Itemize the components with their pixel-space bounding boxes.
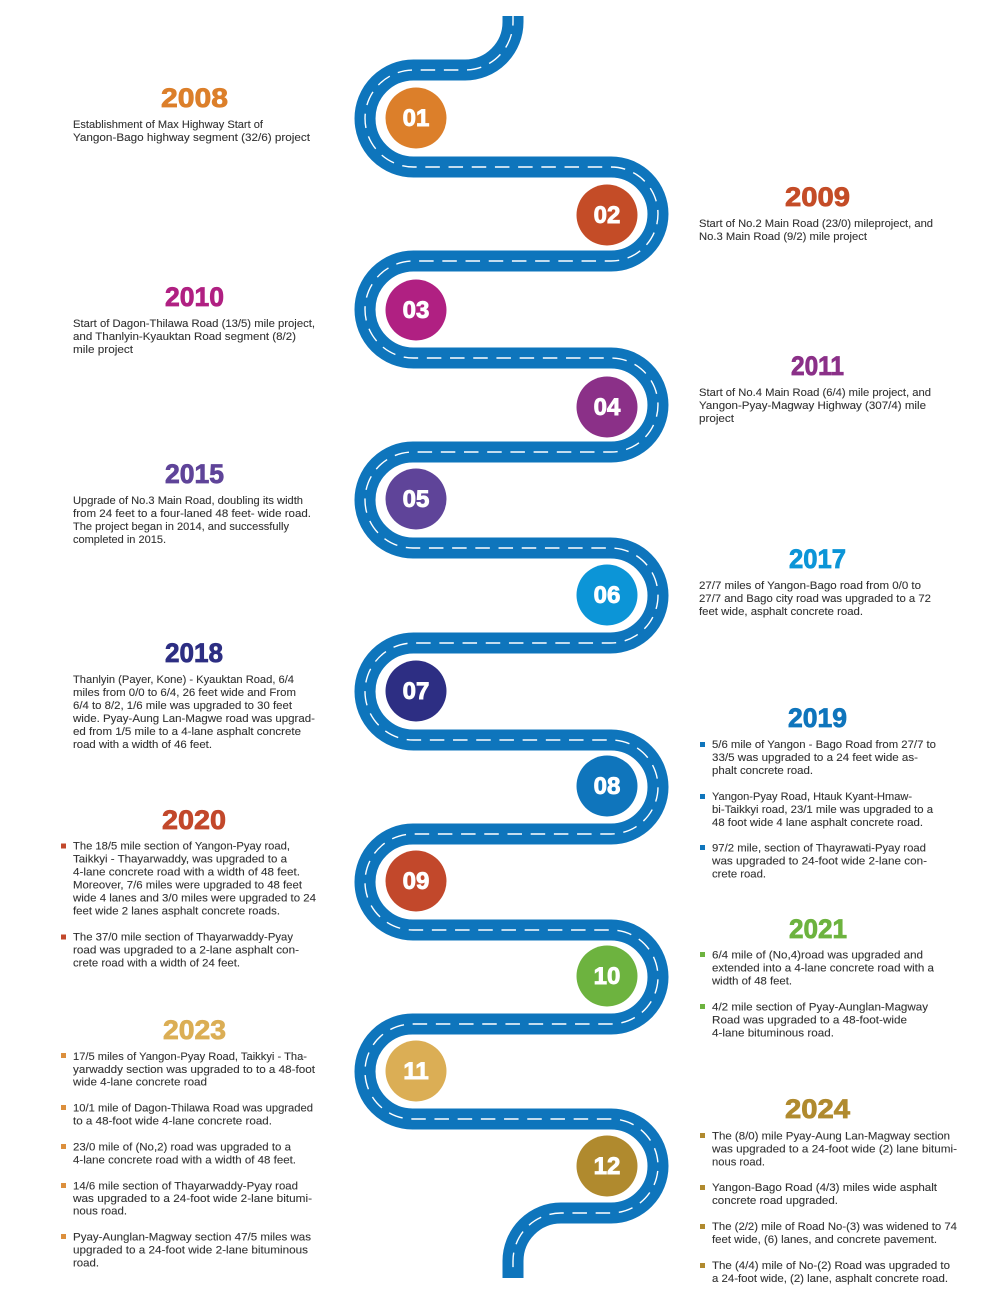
bullet list 2023: yarwaddy section was upgraded to to a 48-foot	[73, 1064, 315, 1076]
text block 2009: No.3 Main Road (9/2) mile project	[699, 231, 867, 243]
marker 07: 07	[403, 678, 429, 705]
marker 11: 11	[403, 1058, 429, 1085]
text block 2018: road with a width of 46 feet.	[73, 739, 212, 751]
marker 08	[576, 756, 638, 816]
text block 2011: project	[699, 413, 734, 425]
text block 2010	[73, 318, 315, 356]
bullet list 2020: road was upgraded to a 2-lane asphalt con-	[73, 944, 299, 956]
panel: 2018	[72, 638, 315, 751]
bullet list 2020: The 18/5 mile section of Yangon-Pyay road,	[73, 840, 290, 852]
bullet list 2020: Taikkyi - Thayarwaddy, was upgraded to a	[73, 854, 288, 866]
bullet list 2021: Road was upgraded to a 48-foot-wide	[712, 1014, 907, 1026]
bullet list 2019: 48 foot wide 4 lane asphalt concrete road.	[712, 817, 923, 829]
marker 07	[386, 660, 446, 722]
bullet list 2024: Yangon-Bago Road (4/3) miles wide asphalt	[712, 1182, 937, 1194]
bullet list 2023: 14/6 mile section of Thayarwaddy-Pyay road	[73, 1180, 298, 1192]
bullet list 2021: extended into a 4-lane concrete road with a	[712, 962, 935, 974]
bullet list 2023: 23/0 mile of (No,2) road was upgraded to a	[73, 1142, 292, 1154]
text block 2018: ed from 1/5 mile to a 4-lane asphalt concrete	[73, 726, 301, 738]
bullet list 2019	[700, 739, 936, 880]
text block 2017: 27/7 and Bago city road was upgraded to a 72	[699, 593, 931, 605]
heading 2018: 2018	[165, 638, 223, 668]
marker 01: 01	[403, 105, 429, 132]
text block 2018: Thanlyin (Payer, Kone) - Kyauktan Road, 6/4	[73, 674, 294, 686]
marker 04: 04	[594, 394, 621, 421]
bullet list 2019: bi-Taikkyi road, 23/1 mile was upgraded to a	[712, 804, 934, 816]
bullet list 2023: nous road.	[73, 1206, 127, 1218]
panel: 2011	[699, 351, 931, 425]
text block 2008: Establishment of Max Highway Start of	[73, 119, 264, 131]
text block 2017: feet wide, asphalt concrete road.	[699, 606, 863, 618]
bullet list 2020: Moreover, 7/6 miles were upgraded to 48 feet	[73, 880, 302, 892]
panel: 2019	[700, 703, 936, 880]
text block 2018: miles from 0/0 to 6/4, 26 feet wide and From	[73, 687, 296, 699]
panel: 2010	[73, 282, 315, 356]
bullet list 2024: was upgraded to a 24-foot wide (2) lane bitumi-	[711, 1144, 957, 1156]
marker 08: 08	[594, 773, 620, 800]
marker 03: 03	[403, 297, 429, 324]
text block 2015: Upgrade of No.3 Main Road, doubling its width	[73, 495, 303, 507]
panel: 2008	[73, 83, 310, 144]
heading 2010: 2010	[165, 282, 224, 312]
marker 06	[576, 564, 638, 626]
marker 10: 10	[594, 963, 620, 990]
heading 2011: 2011	[791, 351, 844, 381]
bullet list 2024: nous road.	[712, 1156, 765, 1168]
heading 2008: 2008	[161, 83, 228, 113]
bullet list 2021: 4/2 mile section of Pyay-Aunglan-Magway	[712, 1002, 929, 1014]
bullet list 2023: road.	[73, 1258, 99, 1270]
text block 2011	[699, 387, 931, 425]
heading 2024: 2024	[785, 1094, 850, 1124]
bullet list 2019: phalt concrete road.	[712, 765, 813, 777]
bullet list 2023: 4-lane concrete road with a width of 48 feet.	[73, 1154, 296, 1166]
bullet list 2019: 5/6 mile of Yangon - Bago Road from 27/7 to	[712, 739, 936, 751]
text block 2018: 6/4 to 8/2, 1/6 mile was upgraded to 30 feet	[73, 700, 292, 712]
bullet list 2019: 33/5 was upgraded to a 24 feet wide as-	[712, 752, 918, 764]
bullet list 2021: 4-lane bituminous road.	[712, 1028, 834, 1040]
bullet list 2024: The (4/4) mile of No-(2) Road was upgraded to	[712, 1260, 950, 1272]
bullet list 2020: feet wide 2 lanes asphalt concrete roads.	[73, 906, 280, 918]
text block 2010: mile project	[73, 344, 133, 356]
bullet list 2023: was upgraded to a 24-foot wide 2-lane bitumi-	[72, 1193, 312, 1205]
marker 09	[386, 850, 446, 912]
bullet list 2023: wide 4-lane concrete road	[72, 1076, 207, 1088]
bullet list 2020: wide 4 lanes and 3/0 miles were upgraded to 24	[72, 892, 316, 904]
marker 02	[576, 184, 638, 246]
text block 2009	[699, 218, 933, 243]
panel: 2020	[61, 805, 316, 970]
marker 06: 06	[594, 582, 620, 609]
heading 2017: 2017	[789, 544, 846, 574]
marker 01	[386, 88, 446, 148]
bullet list 2021: 6/4 mile of (No,4)road was upgraded and	[712, 950, 923, 962]
bullet list 2024: The (8/0) mile Pyay-Aung Lan-Magway section	[712, 1130, 950, 1142]
bullet list 2021	[700, 950, 935, 1040]
heading 2009: 2009	[785, 182, 850, 212]
text block 2010: Start of Dagon-Thilawa Road (13/5) mile project,	[73, 318, 315, 330]
bullet list 2021: width of 48 feet.	[711, 976, 792, 988]
bullet list 2023: Pyay-Aunglan-Magway section 47/5 miles was	[73, 1232, 312, 1244]
bullet list 2020: crete road with a width of 24 feet.	[73, 958, 240, 970]
marker 05: 05	[403, 486, 429, 513]
marker 10	[576, 946, 638, 1006]
bullet list 2024: The (2/2) mile of Road No-(3) was widened to 74	[712, 1221, 957, 1233]
text block 2015	[73, 495, 311, 546]
bullet list 2024	[700, 1130, 957, 1285]
marker 12	[576, 1136, 638, 1196]
bullet list 2020: The 37/0 mile section of Thayarwaddy-Pyay	[73, 932, 294, 944]
heading 2019: 2019	[788, 703, 847, 733]
heading 2015: 2015	[165, 459, 224, 489]
text block 2015: from 24 feet to a four-laned 48 feet- wide road.	[73, 508, 311, 520]
marker 03	[386, 280, 446, 340]
bullet list 2019: Yangon-Pyay Road, Htauk Kyant-Hmaw-	[712, 791, 912, 803]
heading 2023: 2023	[163, 1015, 226, 1045]
text block 2011: Start of No.4 Main Road (6/4) mile project, and	[699, 387, 931, 399]
bullet list 2019: crete road.	[712, 868, 766, 880]
bullet list 2020: 4-lane concrete road with a width of 48 feet.	[73, 866, 300, 878]
bullet list 2023: upgraded to a 24-foot wide 2-lane bituminous	[73, 1244, 309, 1256]
marker 11	[386, 1040, 446, 1102]
text block 2017	[699, 580, 931, 618]
panel: 2024	[700, 1094, 957, 1285]
panel: 2009	[699, 182, 933, 243]
bullet list 2019: 97/2 mile, section of Thayrawati-Pyay road	[712, 842, 926, 854]
text block 2008	[73, 119, 310, 144]
text block 2010: and Thanlyin-Kyauktan Road segment (8/2)	[73, 331, 296, 343]
marker 12: 12	[594, 1153, 620, 1180]
bullet list 2023: 17/5 miles of Yangon-Pyay Road, Taikkyi - Tha-	[73, 1051, 307, 1063]
winding road	[365, 16, 658, 1278]
panel: 2021	[700, 914, 935, 1040]
text block 2017: 27/7 miles of Yangon-Bago road from 0/0 to	[699, 580, 921, 592]
bullet list 2023: to a 48-foot wide 4-lane concrete road.	[73, 1116, 272, 1128]
bullet list 2019: was upgraded to 24-foot wide 2-lane con-	[711, 856, 927, 868]
marker 09: 09	[403, 868, 429, 895]
marker 04	[576, 376, 638, 438]
text block 2008: Yangon-Bago highway segment (32/6) project	[73, 132, 310, 144]
panel: 2015	[73, 459, 311, 546]
heading 2021: 2021	[789, 914, 847, 944]
bullet list 2023: 10/1 mile of Dagon-Thilawa Road was upgraded	[73, 1102, 313, 1114]
bullet list 2024: concrete road upgraded.	[712, 1195, 838, 1207]
bullet list 2024: feet wide, (6) lanes, and concrete pavement.	[712, 1234, 937, 1246]
text block 2015: The project began in 2014, and successfully	[73, 521, 289, 533]
text block 2011: Yangon-Pyay-Magway Highway (307/4) mile	[699, 400, 926, 412]
panel: 2017	[699, 544, 931, 618]
text block 2018	[72, 674, 315, 751]
bullet list 2023	[61, 1051, 315, 1270]
panel: 2023	[61, 1015, 315, 1270]
text block 2018: wide. Pyay-Aung Lan-Magwe road was upgrad-	[72, 713, 315, 725]
bullet list 2020	[61, 840, 316, 970]
marker 05	[386, 468, 446, 530]
marker 02: 02	[594, 202, 620, 229]
text block 2015: completed in 2015.	[73, 534, 166, 546]
heading 2020: 2020	[162, 805, 226, 835]
text block 2009: Start of No.2 Main Road (23/0) mileproject, and	[699, 218, 933, 230]
bullet list 2024: a 24-foot wide, (2) lane, asphalt concrete road.	[712, 1273, 948, 1285]
